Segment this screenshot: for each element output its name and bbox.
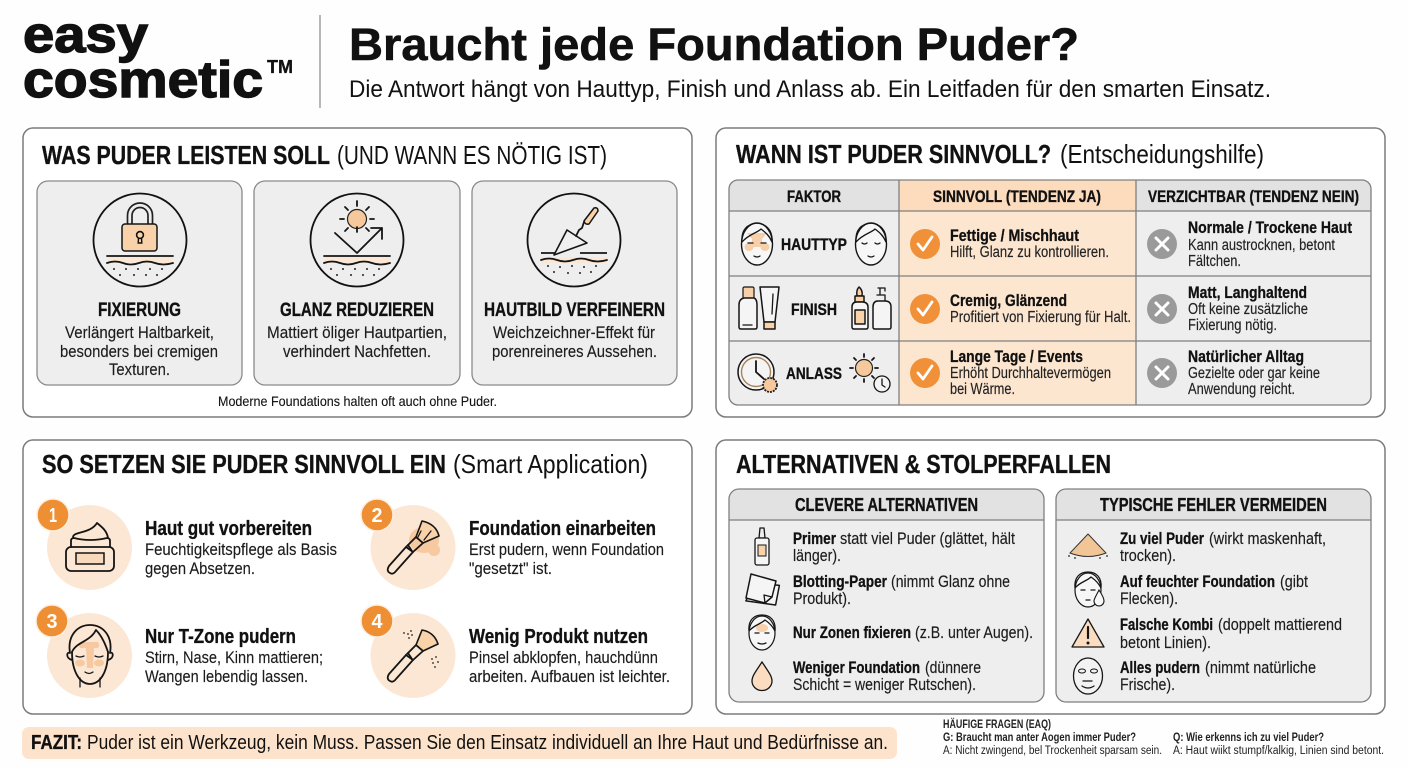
row: Anlass: [738, 347, 1320, 398]
yes: Lange Tage / Events: bei Wärme.: [950, 381, 1015, 398]
item: Primer: [755, 528, 1015, 565]
heading: was Puder leisten soll: [42, 140, 607, 170]
text: Glanz reduzieren: [267, 300, 447, 361]
text: Fixierung: [60, 300, 218, 379]
no: Normale / Trockene Haut: Normale / Trockene Haut: [1188, 218, 1352, 237]
item: auf feuchter Foundation: Flecken).: [1120, 590, 1178, 608]
text: step 1: gegen Absetzen.: [145, 559, 255, 578]
heading: wann ist Puder sinnvoll: (Entscheidungshilfe): [1060, 139, 1264, 169]
item: auf feuchter Foundation: Auf feuchter Foundation: [1120, 573, 1275, 591]
icon: sun reflecting off skin: [310, 194, 404, 286]
no: Normale / Trockene Haut: Kann austrocknen, betont: [1188, 237, 1336, 254]
item: falsche Kombi: betont Linien).: [1120, 634, 1211, 652]
table header: FAKTOR: [787, 187, 841, 206]
item: falsche Kombi: [1072, 616, 1342, 652]
item: Nur Zonen fixieren: [749, 615, 1033, 650]
label: Finish: FINISH: [791, 300, 837, 319]
item: Weniger Foundation: [752, 659, 981, 694]
text: Glanz reduzieren: GLANZ REDUZIEREN: [280, 300, 434, 321]
table header: SINNVOLL (TENDENZ JA): [933, 187, 1101, 206]
table header: [787, 187, 1359, 206]
logo: easy: [23, 6, 149, 63]
no: Natürlicher Alltag: Gezielte oder gar keine: [1188, 365, 1320, 382]
logo: cosmetic: [23, 51, 263, 108]
title: Braucht jede Foundation Puder?: [349, 19, 1079, 70]
text: step 4: arbeiten. Aufbauen ist leichter.: [469, 667, 670, 686]
badge 1: [37, 499, 69, 531]
item: auf feuchter Foundation: (gibt: [1280, 573, 1308, 591]
item: Primer: statt viel Puder (glättet, hält: [840, 530, 1015, 548]
item: Weniger Foundation: (dünnere: [925, 659, 981, 677]
FAQ: [943, 718, 1384, 757]
item: alles pudern: Frische).: [1120, 676, 1175, 694]
item: Weniger Foundation: Weniger Foundation: [793, 659, 920, 677]
no: Natürlicher Alltag: Anwendung reicht.: [1188, 381, 1295, 398]
item: zu viel Puder: (wirkt maskenhaft,: [1209, 530, 1326, 548]
text: step 4: Pinsel abklopfen, hauchdünn: [469, 648, 658, 667]
icon: brush with powder specks: [370, 613, 456, 698]
item: Nur Zonen fixieren: Nur Zonen fixieren: [793, 624, 911, 642]
item: Blotting-Paper: Produkt).: [793, 590, 851, 608]
card: Hautbild verfeinern: [472, 181, 677, 385]
no: Matt, Langhaltend: Fixierung nötig.: [1188, 317, 1277, 334]
no: Matt, Langhaltend: Matt, Langhaltend: [1188, 283, 1307, 302]
row: Finish: [739, 283, 1308, 334]
item: zu viel Puder: Zu viel Puder: [1120, 530, 1204, 548]
text: step 1: Haut gut vorbereiten: [145, 518, 312, 540]
text: step 3: Nur T-Zone pudern: [145, 626, 296, 648]
card: typische Fehler vermeiden: [1056, 489, 1371, 702]
text: Fixierung: FIXIERUNG: [98, 300, 181, 321]
card: Fixierung: [37, 181, 242, 385]
text: step 2: [469, 518, 664, 578]
no: Matt, Langhaltend: Oft keine zusätzliche: [1188, 301, 1308, 318]
logo: TM: [267, 57, 293, 77]
badge 2: 2: [372, 505, 382, 527]
text: step 1: [145, 518, 337, 578]
heading: smart application: SO SETZEN SIE PUDER SINNVOLL EIN: [42, 449, 446, 479]
text: step 3: [145, 626, 323, 686]
text: Hautbild verfeinern: [484, 300, 665, 361]
yes: Fettige / Mischhaut: Fettige / Mischhaut: [950, 226, 1079, 245]
item: Blotting-Paper: (nimmt Glanz ohne: [891, 573, 1010, 591]
icon: padlock on skin: [94, 194, 186, 286]
icon: trowel smoothing skin: [528, 194, 620, 286]
icon: brush with foundation: [370, 505, 456, 590]
yes: Fettige / Mischhaut: Hilft, Glanz zu kontrollieren.: [950, 244, 1109, 261]
text: step 2: "gesetzt" ist.: [469, 559, 552, 578]
FAQ: G: Braucht man anter Aogen immer Puder?: [943, 732, 1136, 744]
step 3: [36, 605, 323, 698]
item: falsche Kombi: (doppelt mattierend: [1218, 616, 1342, 634]
conclusion banner: [22, 727, 897, 759]
icon: clock with sun: [738, 354, 777, 392]
heading: Alternativen und Stolperfallen: ALTERNATIVEN & STOLPERFALLEN: [736, 449, 1111, 479]
text: step 2: Erst pudern, wenn Foundation: [469, 540, 664, 559]
badge 1: 1: [49, 505, 57, 527]
logo: [23, 6, 293, 108]
step 4: [361, 605, 670, 698]
FAQ: HÄUFIGE FRAGEN (EAQ): [943, 718, 1051, 731]
icon: face with shiny T-zone: [742, 223, 772, 265]
item: Weniger Foundation: Schicht = weniger Rutschen).: [793, 676, 976, 694]
card: Glanz reduzieren: [254, 181, 460, 385]
item: Primer: länger).: [793, 547, 841, 565]
FAQ: Q: Wie erkenns ich zu viel Puder?: [1173, 732, 1324, 744]
heading: was Puder leisten soll: (UND WANN ES NÖTIG IST): [337, 140, 607, 170]
heading: was Puder leisten soll: WAS PUDER LEISTEN SOLL: [42, 140, 330, 170]
icon: sun with small clock: [850, 354, 890, 392]
badge 4: [361, 605, 393, 637]
item: auf feuchter Foundation: [1075, 572, 1308, 608]
badge 4: 4: [372, 611, 383, 633]
text: Hautbild verfeinern: porenreineres Aussehen.: [492, 342, 657, 361]
text: Glanz reduzieren: verhindert Nachfetten.: [283, 342, 431, 361]
icon: face with T-zone: [47, 613, 132, 698]
item: alles pudern: Alles pudern: [1120, 659, 1200, 677]
text: Fixierung: besonders bei cremigen: [60, 342, 218, 361]
icon: bottle and tube: [739, 287, 779, 329]
item: Blotting-Paper: [746, 573, 1010, 608]
text: Fixierung: Verlängert Haltbarkeit,: [65, 323, 214, 342]
subtitle: Die Antwort hängt von Hauttyp, Finish und Anlass ab. Ein Leitfaden für den smarten Einsatz.: [349, 76, 1271, 103]
decision table: [729, 180, 1371, 405]
conclusion banner: FAZIT:: [31, 732, 82, 754]
panel: wann ist Puder sinnvoll: [716, 128, 1385, 417]
step 1: [37, 499, 337, 590]
yes: Cremig, Glänzend: Profitiert von Fixierung für Halt.: [950, 309, 1131, 326]
conclusion banner: Puder ist ein Werkzeug, kein Muss. Passen Sie den Einsatz individuell an Ihre Haut und Bedürfnisse an.: [87, 732, 888, 754]
text: Glanz reduzieren: Mattiert öliger Hautpartien,: [267, 323, 447, 342]
FAQ: A: Nicht zwingend, bel Trockenheit sparsam sein.: [943, 745, 1162, 757]
card: clevere Alternativen: [729, 489, 1044, 702]
text: Hautbild verfeinern: Weichzeichner-Effekt für: [493, 323, 655, 342]
text: step 4: [469, 626, 670, 686]
no: Natürlicher Alltag: [1147, 347, 1320, 398]
table header: VERZICHTBAR (TENDENZ NEIN): [1148, 187, 1359, 206]
card header: CLEVERE ALTERNATIVEN: [795, 495, 978, 515]
heading: wann ist Puder sinnvoll: WANN IST PUDER SINNVOLL?: [736, 139, 1051, 169]
text: step 3: Stirn, Nase, Kinn mattieren;: [145, 648, 323, 667]
yes: Fettige / Mischhaut: [910, 226, 1109, 261]
item: zu viel Puder: trocken).: [1120, 547, 1176, 565]
card header: TYPISCHE FEHLER VERMEIDEN: [1100, 495, 1327, 515]
text: Fixierung: Texturen.: [109, 360, 170, 379]
badge 3: [36, 605, 68, 637]
label: Hauttyp: HAUTTYP: [781, 235, 847, 254]
icon: cream jar: [47, 505, 132, 590]
badge 3: 3: [46, 611, 58, 633]
panel: Alternativen und Stolperfallen: [716, 440, 1385, 714]
text: step 3: Wangen lebendig lassen.: [145, 667, 308, 686]
row: Hauttyp: [742, 218, 1352, 270]
item: alles pudern: [1074, 658, 1316, 694]
no: Normale / Trockene Haut: [1147, 218, 1352, 270]
text: step 1: Feuchtigkeitspflege als Basis: [145, 540, 337, 559]
yes: Cremig, Glänzend: [910, 291, 1131, 326]
item: falsche Kombi: Falsche Kombi: [1120, 616, 1213, 634]
icon: calm face: [856, 223, 886, 265]
text: Hautbild verfeinern: HAUTBILD VERFEINERN: [484, 300, 665, 321]
FAQ: A: Haut wiikt stumpf/kalkig, Linien sind betont.: [1173, 745, 1384, 757]
icon: dropper and pump bottles: [852, 287, 891, 329]
item: Nur Zonen fixieren: (z.B. unter Augen).: [915, 624, 1033, 642]
heading: smart application: (Smart Application): [453, 449, 648, 479]
yes: Cremig, Glänzend: Cremig, Glänzend: [950, 291, 1067, 310]
item: Blotting-Paper: Blotting-Paper: [793, 573, 887, 591]
item: zu viel Puder: [1068, 530, 1326, 565]
badge 2: [361, 499, 393, 531]
no: Natürlicher Alltag: Natürlicher Alltag: [1188, 347, 1304, 366]
item: Primer: Primer: [793, 530, 836, 548]
yes: Lange Tage / Events: [910, 347, 1111, 398]
no: Normale / Trockene Haut: Fältchen.: [1188, 253, 1241, 270]
label: Anlass: ANLASS: [786, 364, 842, 383]
text: step 4: Wenig Produkt nutzen: [469, 626, 648, 648]
item: alles pudern: (nimmt natürliche: [1205, 659, 1316, 677]
yes: Lange Tage / Events: Erhöht Durchhaltevermögen: [950, 365, 1111, 382]
panel: was Puder leisten soll: [23, 128, 692, 417]
note: Moderne Foundations halten oft auch ohne Puder.: [218, 393, 497, 409]
step 2: [361, 499, 664, 590]
text: step 2: Foundation einarbeiten: [469, 518, 656, 540]
panel: so setzen Sie Puder sinnvoll ein: [23, 440, 692, 714]
yes: Lange Tage / Events: Lange Tage / Events: [950, 347, 1083, 366]
no: Matt, Langhaltend: [1147, 283, 1308, 334]
